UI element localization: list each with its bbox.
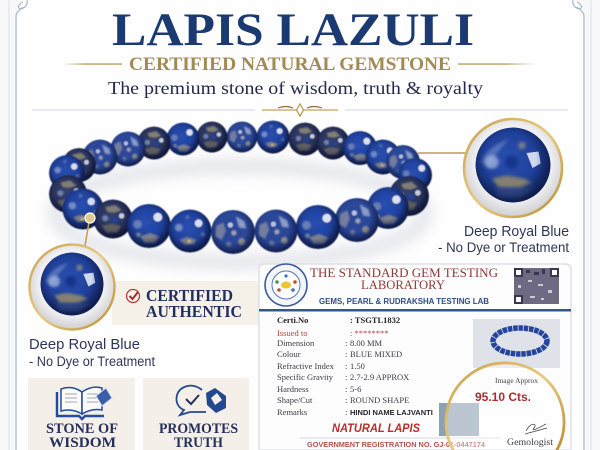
lapis bead bracelet [49, 120, 432, 254]
certified authentic band [112, 281, 259, 325]
certificate data rows: : [345, 395, 347, 405]
title: LAPIS LAZULI [112, 4, 474, 56]
caption: right bead [438, 223, 569, 255]
certificate data rows: : TSGTL1832 [350, 315, 400, 325]
certificate data rows: Specific Gravity [277, 372, 334, 382]
bracelet photo [473, 319, 560, 368]
certificate data rows: : [345, 384, 347, 394]
certificate data rows: Issued to [277, 328, 307, 338]
certificate data rows: : [345, 361, 347, 371]
panel: gem testing certificate [259, 264, 571, 450]
divider with gold ornament [32, 104, 568, 116]
certificate data rows: BLUE MIXED [350, 349, 402, 359]
certificate data rows: : [345, 372, 347, 382]
panel: promotes truth: PROMOTES [159, 421, 238, 437]
magnifier ring with weight: Image Approx [495, 376, 538, 385]
certificate data rows: 8.00 MM [350, 338, 383, 348]
bracelet soft shadow [55, 166, 425, 262]
certificate data rows: : [345, 407, 347, 417]
medallion: right bead close-up [464, 119, 562, 217]
certificate data rows: 1.50 [350, 361, 365, 371]
tagline: The premium stone of wisdom, truth & royalty [108, 78, 483, 98]
certificate data rows: Remarks [277, 407, 307, 417]
certificate data rows [277, 315, 433, 417]
certificate data rows: : [345, 349, 347, 359]
icon: open book [57, 387, 112, 419]
icon: laboratory seal [265, 264, 307, 306]
government registration: GOVERNMENT REGISTRATION NO. GJ-01-0447174 [307, 440, 486, 449]
header rule [259, 309, 571, 312]
certificate data rows: Certi.No [277, 315, 308, 325]
icon: speech bubble with check and gem [176, 386, 226, 415]
certified authentic band: AUTHENTIC [146, 302, 242, 321]
certificate heading: THE STANDARD GEM TESTING [310, 265, 498, 280]
certificate data rows: Colour [277, 349, 301, 359]
certificate data rows: Refractive Index [277, 361, 335, 371]
certificate data rows: HINDI NAME LAJVANTI [350, 408, 433, 417]
subtitle with gold rules: CERTIFIED NATURAL GEMSTONE [129, 54, 451, 75]
certificate data rows: : [345, 338, 347, 348]
gemologist signature: Gemologist [507, 438, 553, 448]
panel: stone of wisdom: STONE OF [46, 421, 118, 437]
panel: stone of wisdom [28, 378, 135, 450]
stamp [439, 403, 479, 436]
caption: left bead: - No Dye or Treatment [29, 354, 155, 369]
gemologist signature [507, 424, 553, 448]
callout connector: right [418, 152, 465, 154]
certificate data rows: ROUND SHAPE [350, 395, 409, 405]
QR code [514, 268, 559, 304]
certified authentic band: CERTIFIED [146, 286, 233, 305]
certificate heading: LABORATORY [361, 277, 446, 292]
certificate data rows: : ******** [350, 328, 388, 338]
panel: promotes truth [143, 378, 249, 450]
certificate data rows: Dimension [277, 338, 315, 348]
magnifier ring with weight: 95.10 Cts. [475, 392, 531, 404]
caption: left bead [29, 336, 155, 369]
callout connector: left [85, 213, 95, 246]
magnifier ring with weight [446, 363, 564, 450]
medallion: left bead close-up [30, 244, 114, 330]
certificate data rows: 5-6 [350, 384, 361, 394]
certificate data rows: Shape/Cut [277, 395, 313, 405]
caption: right bead: Deep Royal Blue [464, 223, 569, 240]
certificate data rows: Hardness [277, 384, 309, 394]
natural lapis label: NATURAL LAPIS [332, 423, 420, 435]
certificate data rows: 2.7-2.9 APPROX [350, 372, 409, 382]
certificate heading [310, 265, 498, 292]
certificate sub-heading: GEMS, PEARL & RUDRAKSHA TESTING LAB [319, 297, 489, 306]
caption: right bead: - No Dye or Treatment [438, 240, 569, 255]
caption: left bead: Deep Royal Blue [29, 336, 140, 353]
